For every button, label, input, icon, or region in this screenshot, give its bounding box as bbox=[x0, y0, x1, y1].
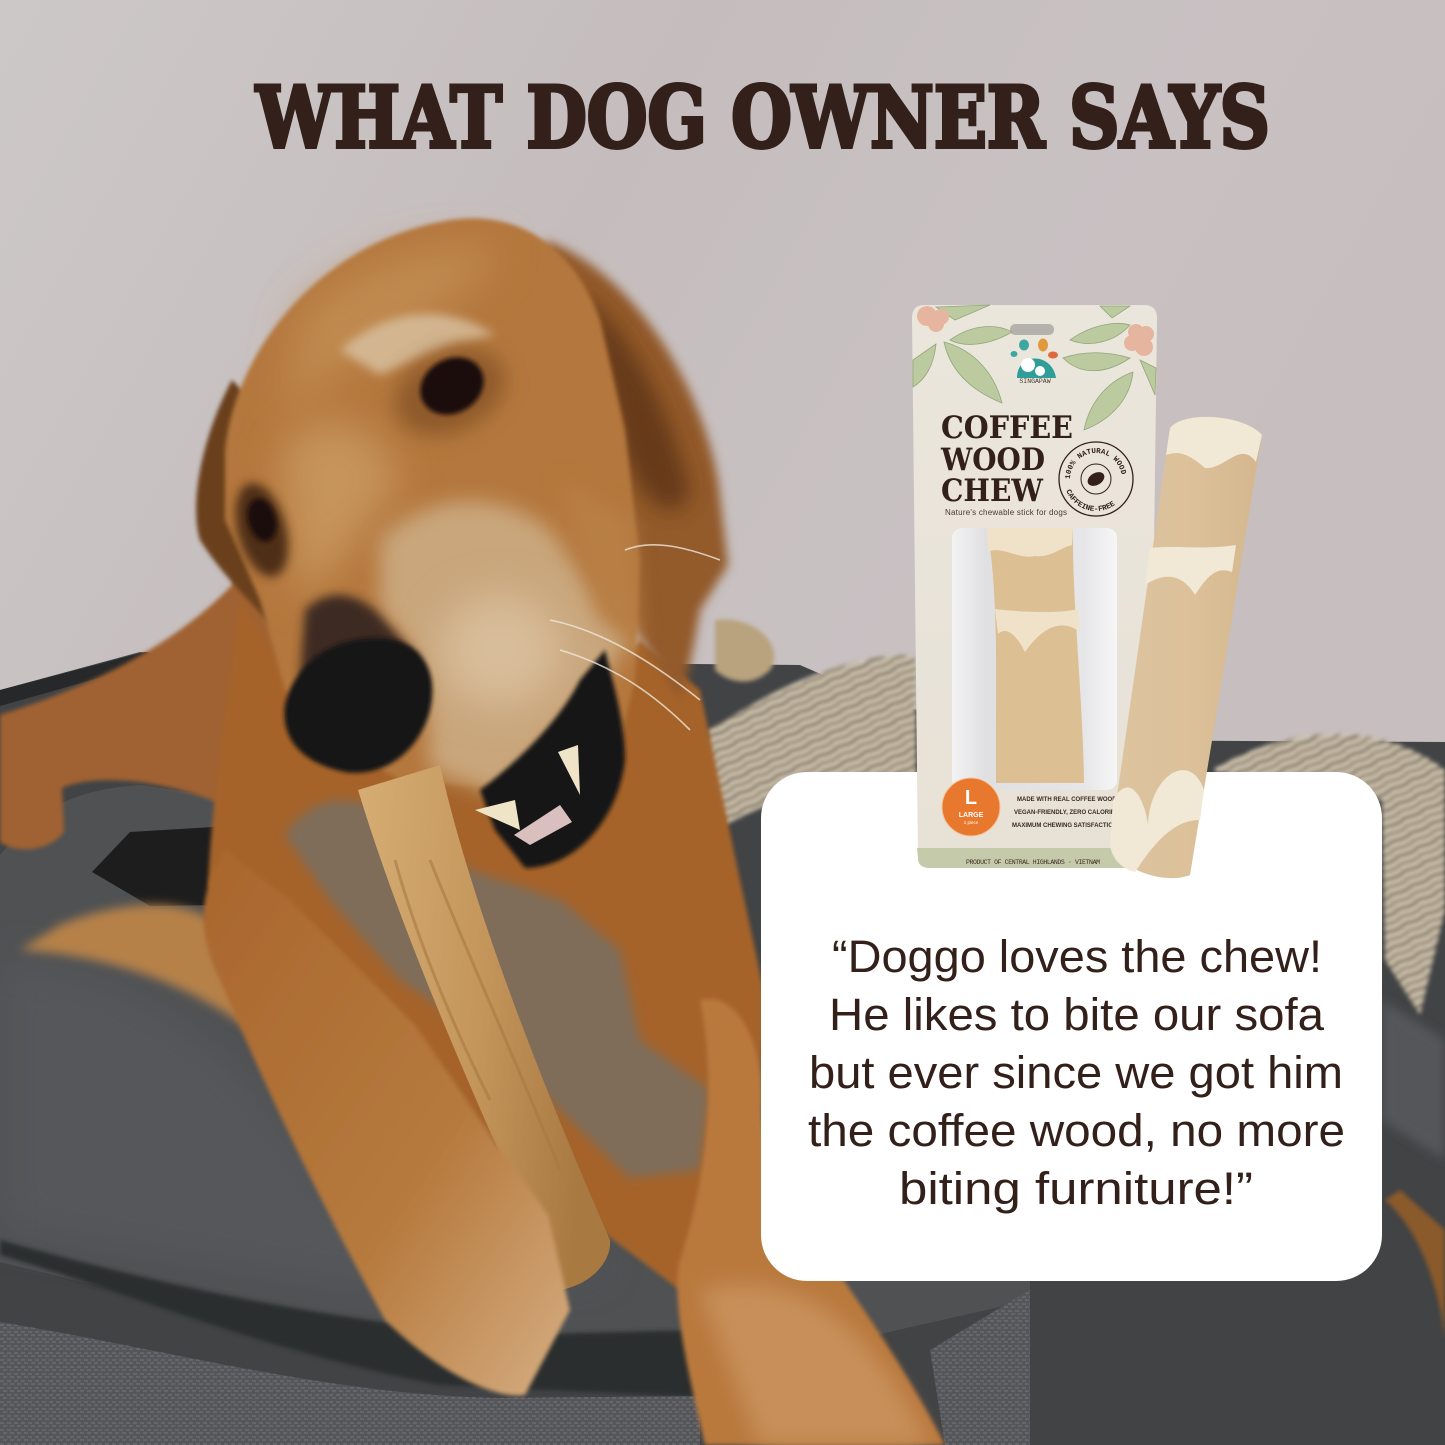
cheek warm bbox=[560, 480, 640, 640]
product claims: MADE WITH REAL COFFEE WOOD bbox=[1017, 797, 1117, 803]
teeth bbox=[475, 745, 580, 845]
right arm bbox=[677, 999, 945, 1445]
bed fabric: bottom centre bbox=[930, 1290, 1030, 1445]
side of face light bbox=[280, 422, 400, 600]
toy fur bbox=[285, 801, 710, 1178]
chew pale bands bbox=[987, 528, 1080, 652]
forehead light bbox=[280, 248, 500, 420]
window bbox=[952, 528, 1117, 790]
origin line: PRODUCT OF CENTRAL HIGHLANDS · VIETNAM bbox=[966, 859, 1100, 866]
eye patch bbox=[381, 331, 519, 453]
testimonial quote: “Doggo loves the chew! bbox=[832, 931, 1322, 982]
product name bbox=[940, 410, 1073, 509]
nose bridge bbox=[300, 595, 420, 680]
natural badge bbox=[1058, 441, 1134, 517]
back leg bbox=[0, 555, 300, 849]
bed fabric: bottom weave bbox=[0, 1322, 700, 1445]
brow highlight bbox=[340, 314, 495, 375]
testimonial quote bbox=[808, 931, 1345, 1214]
brand logo: SINGAPAW bbox=[1019, 378, 1051, 385]
nose bbox=[284, 638, 432, 773]
left arm bbox=[204, 850, 570, 1395]
chest and body bbox=[208, 600, 766, 1290]
product name: COFFEE bbox=[941, 410, 1073, 446]
size badge: L bbox=[965, 787, 977, 809]
testimonial quote: biting furniture!” bbox=[899, 1163, 1253, 1214]
right arm highlight bbox=[700, 1285, 930, 1445]
dog bbox=[0, 218, 945, 1445]
ear right bbox=[545, 240, 728, 700]
background: wall bbox=[0, 0, 1445, 770]
tagline: Nature's chewable stick for dogs bbox=[945, 508, 1067, 517]
product claims: VEGAN-FRIENDLY, ZERO CALORIE bbox=[1014, 810, 1115, 816]
brand logo bbox=[1010, 338, 1058, 385]
pouch bbox=[912, 305, 1157, 868]
panel: testimonial card bbox=[761, 772, 1382, 1281]
pouch footer bbox=[917, 848, 1151, 868]
muzzle highlight bbox=[380, 501, 630, 795]
ear dark inner bbox=[580, 290, 690, 510]
testimonial quote: but ever since we got him bbox=[809, 1047, 1343, 1098]
testimonial quote: He likes to bite our sofa bbox=[829, 989, 1325, 1040]
product claims bbox=[1012, 797, 1117, 829]
size badge bbox=[942, 778, 1000, 836]
mouth bbox=[480, 650, 625, 868]
cushion bbox=[0, 785, 1030, 1397]
product name: WOOD bbox=[940, 442, 1045, 478]
hang hole bbox=[1010, 324, 1054, 335]
product name: CHEW bbox=[941, 473, 1044, 509]
coffee cherries bbox=[917, 306, 1154, 356]
chew in window bbox=[987, 528, 1084, 783]
background: dog bed bbox=[0, 652, 1445, 1445]
natural badge: CAFFEINE-FREE bbox=[1066, 490, 1115, 511]
product claims: MAXIMUM CHEWING SATISFACTION bbox=[1012, 823, 1117, 829]
product package bbox=[912, 304, 1157, 868]
leaves bbox=[913, 305, 1156, 430]
loose coffee wood chew bbox=[1110, 417, 1262, 878]
ear left bbox=[196, 380, 300, 640]
testimonial quote: the coffee wood, no more bbox=[808, 1105, 1345, 1156]
muzzle bright patch bbox=[440, 595, 560, 705]
eye right bbox=[410, 346, 494, 426]
chew stick bbox=[358, 765, 610, 1290]
size badge: LARGE bbox=[959, 812, 984, 819]
rope toy: left bbox=[707, 655, 916, 825]
size badge: 1 piece bbox=[964, 820, 979, 825]
title: WHAT DOG OWNER SAYS bbox=[255, 68, 1270, 167]
whiskers bbox=[550, 545, 720, 730]
tail bbox=[20, 905, 250, 1030]
toy behind head bbox=[715, 620, 774, 682]
head bbox=[225, 218, 640, 790]
rope toy: right bbox=[1215, 734, 1445, 1015]
eye left bbox=[243, 495, 281, 545]
natural badge: 100% NATURAL WOOD bbox=[1065, 448, 1126, 479]
left eye patch bbox=[226, 477, 298, 583]
